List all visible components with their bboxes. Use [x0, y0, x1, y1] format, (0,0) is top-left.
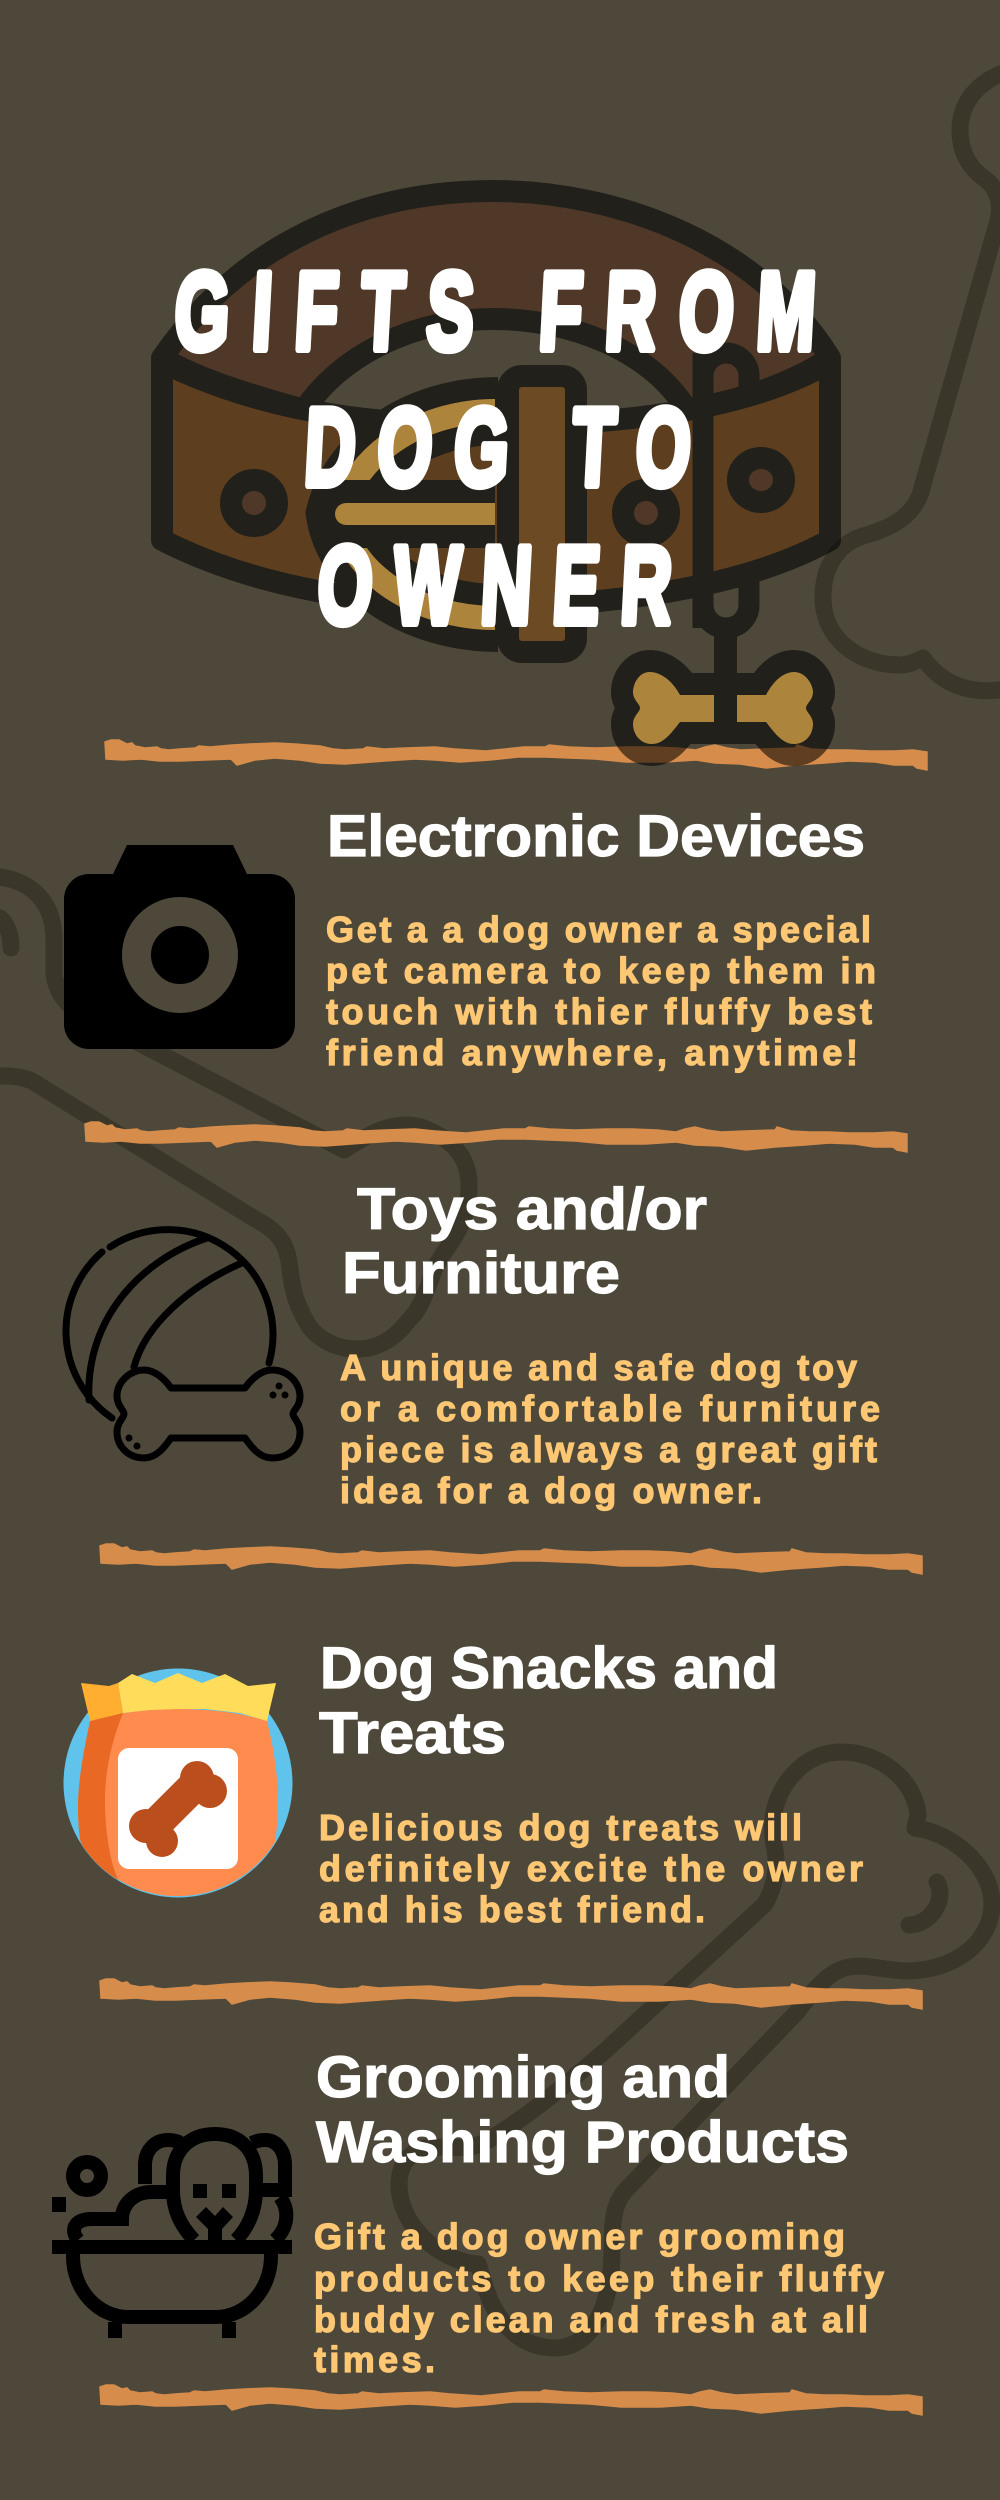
ball seams — [89, 1238, 244, 1400]
divider 1 — [105, 740, 927, 770]
divider 2 — [85, 1122, 907, 1152]
heading: Toys and/or Furniture: Furniture — [342, 1241, 620, 1306]
text: toys description: piece is always a great gift — [340, 1429, 877, 1470]
text: treats description: and his best friend. — [319, 1889, 705, 1930]
text: toys description — [340, 1347, 880, 1511]
middle rivet — [623, 490, 669, 536]
heading: Grooming and Washing Products — [316, 2045, 849, 2175]
title line 2: DOG TO — [302, 385, 694, 509]
bone toy — [117, 1370, 300, 1458]
bag body — [78, 1709, 278, 1896]
icon: camera — [64, 845, 295, 1049]
right rivet — [738, 458, 784, 502]
leash strand over band — [692, 353, 714, 628]
divider 3 — [100, 1544, 922, 1574]
text: electronic devices description: pet camera to keep them in — [326, 950, 876, 991]
buckle inner — [375, 448, 495, 583]
text: toys description: idea for a dog owner. — [340, 1470, 762, 1511]
left rivet — [231, 480, 277, 526]
tag chain — [714, 625, 737, 743]
collar top face — [162, 191, 830, 410]
text: treats description: definitely excite the owner — [319, 1848, 863, 1889]
heading: Toys and/or Furniture — [342, 1177, 707, 1306]
bag crimp orange — [81, 1683, 123, 1721]
title line 1: GIFTS FROM — [172, 249, 819, 373]
leash loop — [703, 353, 749, 628]
tub rim, feet, eyes, nose, bubble square — [52, 2184, 292, 2338]
buckle bar gold — [335, 503, 495, 525]
text: electronic devices description: Get a a dog owner a special — [326, 909, 871, 950]
heading: Grooming and Washing Products: Grooming and — [316, 2045, 730, 2110]
text: electronic devices description — [326, 909, 876, 1073]
background bone: lower right — [399, 1752, 992, 2348]
title — [172, 249, 819, 647]
bone on label — [129, 1761, 227, 1857]
bag shaded side — [78, 1713, 123, 1880]
text: electronic devices description: friend anywhere, anytime! — [326, 1032, 858, 1073]
text: toys description: or a comfortable furniture — [340, 1388, 880, 1429]
tub and dog outline — [73, 2134, 286, 2317]
heading: Dog Snacks and Treats — [319, 1636, 778, 1766]
title line 3: OWNER — [315, 523, 675, 647]
ball outline — [66, 1230, 273, 1418]
text: electronic devices description: touch with thier fluffy best — [326, 991, 872, 1032]
text: toys description: A unique and safe dog toy — [340, 1347, 857, 1388]
bone dots — [126, 1382, 288, 1450]
text: grooming description: times. — [314, 2339, 435, 2380]
heading: Dog Snacks and Treats: Treats — [319, 1701, 506, 1766]
collar band — [162, 362, 830, 606]
background bone: top right — [823, 74, 1000, 691]
heading: Electronic Devices: Electronic Devices — [327, 804, 865, 869]
camera lens ring — [136, 912, 224, 998]
heading: Dog Snacks and Treats: Dog Snacks and — [320, 1636, 778, 1701]
text: grooming description — [314, 2216, 884, 2380]
text: grooming description: products to keep their fluffy — [314, 2258, 884, 2299]
white label — [118, 1748, 238, 1869]
text: grooming description: Gift a dog owner grooming — [314, 2216, 845, 2257]
camera body — [64, 845, 295, 1049]
heading: Grooming and Washing Products: Washing Products — [316, 2110, 849, 2175]
icon: dog treat bag — [64, 1668, 292, 1898]
text: grooming description: buddy clean and fresh at all — [314, 2299, 868, 2340]
strap keeper — [508, 376, 576, 652]
heading: Toys and/or Furniture: Toys and/or — [357, 1177, 707, 1242]
divider 5 — [100, 2385, 922, 2415]
text: treats description — [319, 1807, 863, 1930]
text: treats description: Delicious dog treats will — [319, 1807, 802, 1848]
icon: dog collar with bone tag — [162, 191, 830, 744]
buckle ring outline — [340, 411, 498, 618]
icon: ball and bone toy — [66, 1230, 300, 1458]
blue circle — [64, 1668, 292, 1898]
buckle bar — [312, 480, 495, 548]
background bone: left — [0, 877, 469, 1349]
icon: dog in bathtub — [52, 2134, 292, 2338]
divider 4 — [100, 1979, 922, 2009]
buckle ring gold — [340, 411, 495, 618]
bone tag — [633, 672, 813, 744]
bag crimp yellow — [118, 1673, 276, 1721]
